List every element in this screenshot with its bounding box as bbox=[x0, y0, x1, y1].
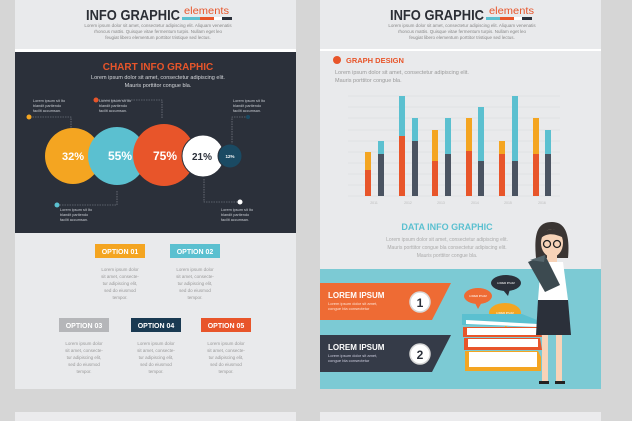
header text left: Lorem ipsum dolor sit amet, consectetur adipiscing elit. Aliquam venenatis bbox=[84, 23, 232, 28]
illustration: woman bbox=[528, 222, 571, 384]
options grid: OPTION 04 bbox=[138, 323, 174, 330]
panel: right sheet bbox=[320, 0, 601, 389]
options grid: OPTION 01 bbox=[102, 249, 138, 256]
speech bubbles: LOREM IPSUM bbox=[496, 312, 514, 315]
header text left: feugiat libero elementum porttitor tristique sed lectus. bbox=[105, 35, 211, 40]
bar chart: 2011 bbox=[370, 201, 378, 205]
callout texts: facilit accumsan. bbox=[60, 218, 88, 222]
options grid: OPTION 03 bbox=[66, 323, 102, 330]
data subtitle: Mauris porttitor congue bla. bbox=[417, 253, 477, 259]
option texts: tur adipiscing elit, bbox=[103, 281, 137, 286]
subtitle: Lorem ipsum dolor sit amet, consectetur adipiscing elit. bbox=[91, 75, 225, 81]
callout dots bbox=[26, 98, 250, 208]
banner 2 bbox=[320, 335, 451, 372]
callout texts: Lorem ipsum sit Ito bbox=[221, 208, 253, 212]
callout texts: Lorem ipsum sit Ito bbox=[233, 99, 265, 103]
circles chart: 21% bbox=[192, 152, 212, 163]
bar chart: 2012 bbox=[404, 201, 412, 205]
option texts: sit amet, consecte- bbox=[137, 348, 175, 353]
banner 1: congue bla consectetur bbox=[328, 306, 370, 311]
banner 1 bbox=[320, 283, 451, 320]
heading: data info graphic: DATA INFO GRAPHIC bbox=[401, 222, 493, 232]
option texts: tur adipiscing elit, bbox=[67, 355, 101, 360]
data subtitle: Lorem ipsum dolor sit amet, consectetur adipiscing elit. bbox=[386, 237, 508, 243]
banner 1: LOREM IPSUM bbox=[328, 291, 385, 300]
option texts: Lorem ipsum dolor bbox=[207, 341, 245, 346]
callout texts bbox=[33, 99, 265, 222]
callout texts: blandit partiendo bbox=[233, 104, 261, 108]
callout texts: facilit accumsan. bbox=[221, 218, 249, 222]
title right: elements bbox=[489, 6, 534, 17]
option texts: tempor. bbox=[112, 295, 128, 300]
option texts: Lorem ipsum dolor bbox=[65, 341, 103, 346]
callout texts: Lorem ipsum sit Ito bbox=[99, 99, 131, 103]
title left: INFO GRAPHIC bbox=[86, 7, 180, 24]
panel: dark chart panel bbox=[15, 52, 296, 233]
header text right: rhoncus mattis. Quisque vitae fermentum turpis. Nullam eget leo bbox=[398, 29, 527, 34]
header text right bbox=[388, 23, 536, 40]
data subtitle bbox=[386, 237, 508, 259]
subtitle: Mauris porttitor congue bla. bbox=[125, 83, 192, 89]
option texts: Lorem ipsum dolor bbox=[176, 267, 214, 272]
callout texts: blandit partiendo bbox=[99, 104, 127, 108]
speech bubbles bbox=[464, 275, 521, 328]
circles chart bbox=[45, 124, 242, 186]
callout texts: Lorem ipsum sit Ito bbox=[60, 208, 92, 212]
option texts: sed do eiusmod bbox=[210, 362, 242, 367]
blue band bbox=[320, 269, 601, 389]
options grid bbox=[59, 244, 251, 332]
option texts bbox=[65, 267, 245, 374]
circles chart: 12% bbox=[225, 154, 235, 159]
bar chart: 2015 bbox=[504, 201, 512, 205]
bar chart: 2016 bbox=[538, 201, 546, 205]
option texts: sed do eiusmod bbox=[140, 362, 172, 367]
bar chart: 2013 bbox=[437, 201, 445, 205]
header text right: feugiat libero elementum porttitor tristique sed lectus. bbox=[409, 35, 515, 40]
circles chart: 32% bbox=[62, 151, 84, 163]
banner 1: 1 bbox=[417, 296, 424, 310]
callout lines bbox=[30, 100, 248, 205]
banner 2: congue bla consectetur bbox=[328, 358, 370, 363]
banner 2: LOREM IPSUM bbox=[328, 343, 385, 352]
option texts: tur adipiscing elit, bbox=[209, 355, 243, 360]
option texts: sit amet, consecte- bbox=[101, 274, 139, 279]
subtitle bbox=[91, 75, 225, 89]
speech bubbles: LOREM IPSUM bbox=[469, 295, 487, 298]
banner 2: Lorem ipsum dolor sit amet, bbox=[328, 353, 377, 358]
panel: left sheet bbox=[15, 0, 296, 389]
option texts: sed do eiusmod bbox=[104, 288, 136, 293]
option texts: tempor. bbox=[187, 295, 203, 300]
option texts: tempor. bbox=[76, 369, 92, 374]
title right: INFO GRAPHIC bbox=[390, 7, 484, 24]
title left: elements bbox=[184, 6, 229, 17]
option texts: tur adipiscing elit, bbox=[178, 281, 212, 286]
graph subtitle bbox=[335, 70, 469, 84]
graph subtitle: Mauris porttitor congue bla. bbox=[335, 78, 402, 84]
header text right: Lorem ipsum dolor sit amet, consectetur adipiscing elit. Aliquam venenatis bbox=[388, 23, 536, 28]
option texts: tempor. bbox=[148, 369, 164, 374]
banner 2: 2 bbox=[417, 348, 424, 362]
option texts: tur adipiscing elit, bbox=[139, 355, 173, 360]
circles chart: 55% bbox=[108, 149, 132, 163]
option texts: sit amet, consecte- bbox=[65, 348, 103, 353]
callout texts: blandit partiendo bbox=[60, 213, 88, 217]
header text left: rhoncus mattis. Quisque vitae fermentum turpis. Nullam eget leo bbox=[94, 29, 223, 34]
bar chart: 2014 bbox=[471, 201, 479, 205]
graph subtitle: Lorem ipsum dolor sit amet, consectetur adipiscing elit. bbox=[335, 70, 469, 76]
callout texts: facilit accumsan. bbox=[233, 109, 261, 113]
icon: books stack bbox=[462, 314, 542, 371]
banner 1: Lorem ipsum dolor sit amet, bbox=[328, 301, 377, 306]
option texts: sit amet, consecte- bbox=[176, 274, 214, 279]
bar chart bbox=[348, 96, 560, 205]
header text left bbox=[84, 23, 232, 40]
options grid: OPTION 02 bbox=[177, 249, 213, 256]
callout texts: facilit accumsan. bbox=[33, 109, 61, 113]
speech bubbles: LOREM IPSUM bbox=[497, 282, 515, 285]
circles chart: 75% bbox=[153, 149, 177, 163]
data subtitle: Mauris porttitor congue bla consectetur adipiscing elit. bbox=[387, 245, 507, 251]
callout texts: blandit partiendo bbox=[221, 213, 249, 217]
option texts: sed do eiusmod bbox=[68, 362, 100, 367]
option texts: sed do eiusmod bbox=[179, 288, 211, 293]
heading: chart info graphic: CHART INFO GRAPHIC bbox=[103, 62, 213, 73]
panel: bottom sheets bbox=[15, 412, 601, 421]
callout texts: facilit accumsan. bbox=[99, 109, 127, 113]
options grid: OPTION 05 bbox=[208, 323, 244, 330]
callout texts: blandit partiendo bbox=[33, 104, 61, 108]
callout texts: Lorem ipsum sit Ito bbox=[33, 99, 65, 103]
option texts: Lorem ipsum dolor bbox=[101, 267, 139, 272]
heading: graph design: GRAPH DESIGN bbox=[346, 56, 404, 65]
option texts: Lorem ipsum dolor bbox=[137, 341, 175, 346]
option texts: tempor. bbox=[218, 369, 234, 374]
option texts: sit amet, consecte- bbox=[207, 348, 245, 353]
